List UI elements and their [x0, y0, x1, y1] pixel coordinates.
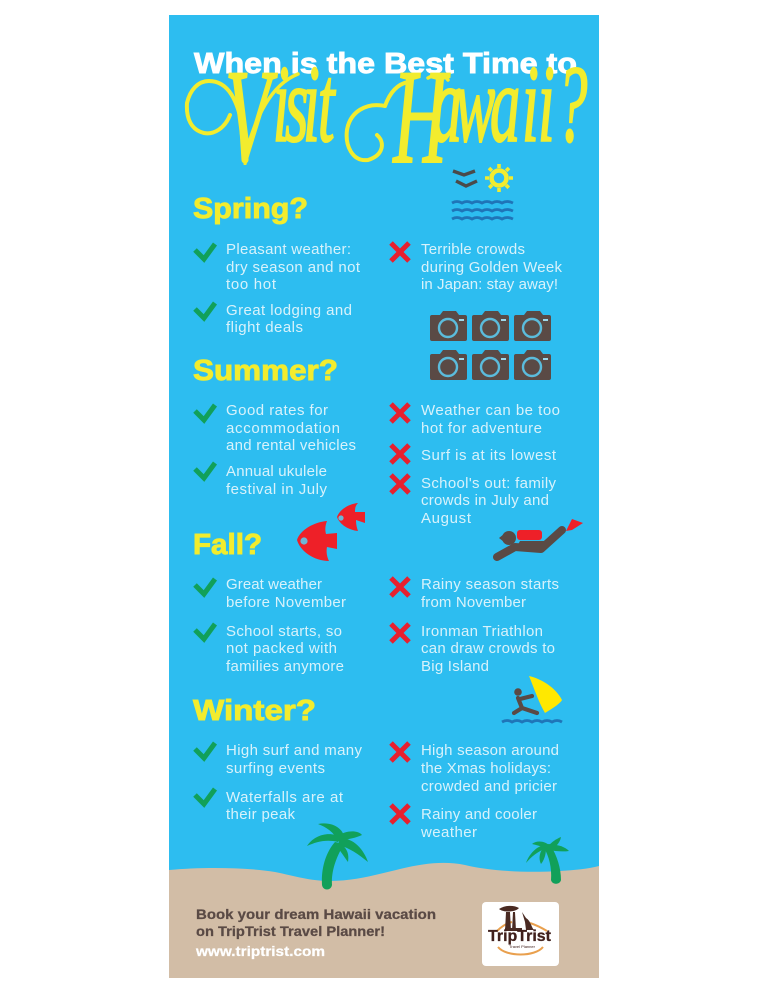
title: Visit Hawaii? [187, 42, 587, 192]
fall pros: before November [226, 594, 346, 611]
fall cons: from November [421, 594, 526, 611]
summer cons: Surf is at its lowest [421, 447, 557, 464]
icon: birds, sun and waves [452, 164, 513, 219]
summer pros: festival in July [226, 481, 328, 498]
title: Visit Hawaii?: H [392, 42, 450, 192]
icon: large palm tree [307, 823, 368, 890]
spring pros: Pleasant weather: [226, 241, 351, 258]
call to action: on TripTrist Travel Planner! [196, 923, 385, 939]
spring pros [195, 241, 361, 336]
summer cons: August [421, 510, 472, 527]
sand beach [169, 863, 599, 978]
title: When is the Best Time to: When is the Best Time to [194, 48, 577, 80]
logo: TripTrist [482, 902, 559, 966]
fall pros: not packed with [226, 640, 337, 657]
summer cons: School's out: family [421, 475, 556, 492]
panel: background [169, 15, 599, 978]
fall cons: Ironman Triathlon [421, 623, 543, 640]
fall cons: Big Island [421, 658, 489, 675]
spring pros: Great lodging and [226, 302, 352, 319]
winter cons: High season around [421, 742, 559, 759]
summer cons: hot for adventure [421, 420, 542, 437]
icon: red fish [297, 503, 365, 561]
spring cons: during Golden Week [421, 259, 562, 276]
winter pros: surfing events [226, 760, 325, 777]
summer cons [391, 402, 560, 527]
winter cons: crowded and pricier [421, 778, 557, 795]
heading: Spring: Spring? [193, 193, 308, 225]
summer pros: Annual ukulele [226, 463, 327, 480]
icon: six cameras [430, 311, 551, 380]
spring pros: dry season and not [226, 259, 361, 276]
winter pros [195, 742, 362, 823]
winter cons: Rainy and cooler [421, 806, 537, 823]
fall pros [195, 576, 346, 675]
fall pros: Great weather [226, 576, 322, 593]
fall cons: Rainy season starts [421, 576, 559, 593]
spring cons: in Japan: stay away! [421, 276, 558, 293]
heading: Summer: Summer? [193, 355, 338, 387]
title: Visit Hawaii?: awaii? [432, 44, 587, 166]
summer pros: accommodation [226, 420, 340, 437]
spring cons [391, 241, 562, 293]
fall cons [391, 576, 559, 675]
logo: TripTrist: Travel Planner [509, 944, 536, 949]
summer pros: and rental vehicles [226, 437, 356, 454]
summer cons: Weather can be too [421, 402, 560, 419]
summer pros: Good rates for [226, 402, 328, 419]
title: Visit Hawaii?: isit [273, 44, 400, 166]
fall pros: School starts, so [226, 623, 342, 640]
call to action: Book your dream Hawaii vacation [196, 906, 436, 922]
heading: Fall: Fall? [193, 529, 262, 561]
fall pros: families anymore [226, 658, 344, 675]
spring cons: Terrible crowds [421, 241, 525, 258]
logo: TripTrist: TripTrist [488, 928, 551, 945]
spring pros: too hot [226, 276, 277, 293]
fall cons: can draw crowds to [421, 640, 555, 657]
winter pros: Waterfalls are at [226, 789, 344, 806]
icon: windsurfer [502, 676, 562, 722]
summer pros [195, 402, 356, 498]
icon: small palm tree [526, 837, 569, 884]
call to action: www.triptrist.com [195, 943, 325, 959]
heading: Winter: Winter? [193, 695, 316, 727]
call to action [195, 906, 436, 959]
winter pros: their peak [226, 806, 296, 823]
title: Visit Hawaii?: V [225, 42, 278, 192]
icon: scuba diver [497, 519, 583, 557]
winter pros: High surf and many [226, 742, 362, 759]
spring pros: flight deals [226, 319, 303, 336]
summer cons: crowds in July and [421, 492, 549, 509]
winter cons [391, 742, 559, 841]
winter cons: the Xmas holidays: [421, 760, 551, 777]
winter cons: weather [420, 824, 477, 841]
